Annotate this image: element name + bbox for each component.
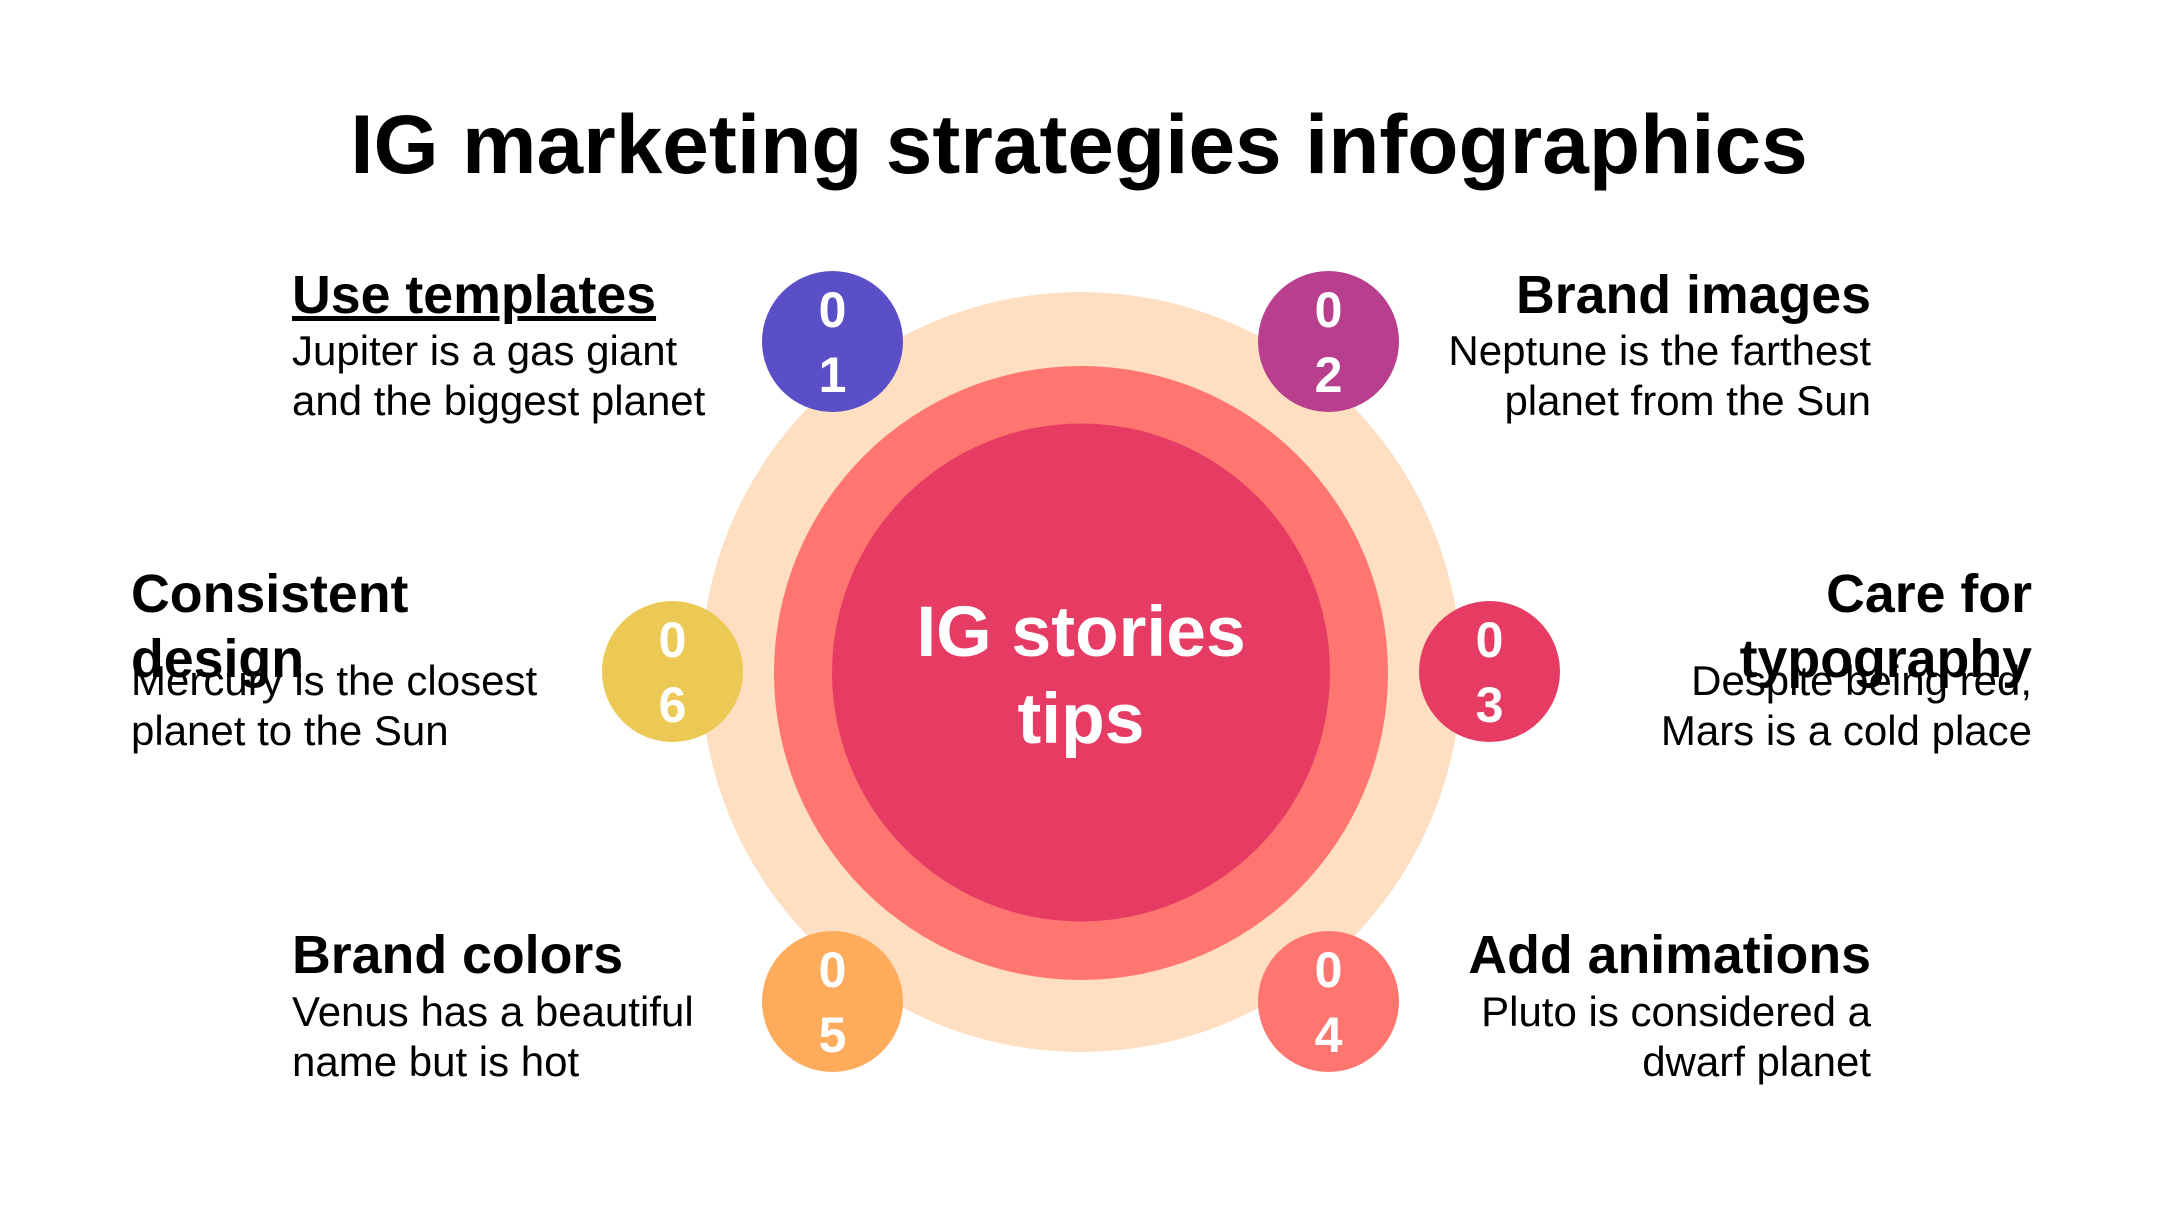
item 06: consistent design: Mercury is the closest [131, 657, 537, 704]
item 04: add animations [1468, 925, 1871, 1085]
item 03: care for typography: Mars is a cold place [1661, 707, 2032, 754]
badge 02 [1258, 271, 1399, 412]
item 05: brand colors: Brand colors [292, 925, 623, 985]
item 01: use templates: Use templates [292, 265, 656, 325]
item 04: add animations: dwarf planet [1642, 1038, 1871, 1085]
item 02: brand images [1448, 265, 1871, 424]
item 05: brand colors [292, 925, 694, 1085]
item 02: brand images: Brand images [1516, 265, 1871, 325]
center label: IG stories [916, 592, 1246, 672]
item 06: consistent design: planet to the Sun [131, 707, 449, 754]
center label [916, 592, 1246, 759]
item 03: care for typography [1661, 564, 2032, 754]
item 01: use templates: and the biggest planet [292, 377, 705, 424]
item 05: brand colors: name but is hot [292, 1038, 579, 1085]
item 03: care for typography: Care for [1826, 564, 2032, 624]
badge 04: 0 [1315, 942, 1342, 998]
item 06: consistent design: Consistent [131, 564, 408, 624]
badge 06: 6 [659, 677, 686, 733]
badge 05 [762, 931, 903, 1072]
item 03: care for typography: typography [1740, 629, 2032, 689]
badge 05: 5 [819, 1007, 846, 1063]
badge 04 [1258, 931, 1399, 1072]
badge 03: 0 [1476, 612, 1503, 668]
item 04: add animations: Pluto is considered a [1481, 988, 1871, 1035]
title: IG marketing strategies infographics [350, 97, 1808, 191]
item 02: brand images: planet from the Sun [1504, 377, 1871, 424]
item 04: add animations: Add animations [1468, 925, 1871, 985]
item 05: brand colors: Venus has a beautiful [292, 988, 694, 1035]
badge 04: 4 [1315, 1007, 1342, 1063]
center label: tips [1018, 679, 1144, 759]
item 06: consistent design: design [131, 629, 304, 689]
badge 03: 3 [1476, 677, 1503, 733]
badge 01: 1 [819, 347, 846, 403]
badge 01: 0 [819, 282, 846, 338]
badge 01 [762, 271, 903, 412]
item 03: care for typography: Despite being red, [1691, 657, 2032, 704]
badge 06 [602, 601, 743, 742]
badge 03 [1419, 601, 1560, 742]
item 06: consistent design [131, 564, 537, 754]
badge 05: 0 [819, 942, 846, 998]
badge 02: 2 [1315, 347, 1342, 403]
item 02: brand images: Neptune is the farthest [1448, 327, 1871, 374]
badge 06: 0 [659, 612, 686, 668]
item 01: use templates [292, 265, 705, 424]
item 01: use templates: Jupiter is a gas giant [292, 327, 677, 374]
badge 02: 0 [1315, 282, 1342, 338]
